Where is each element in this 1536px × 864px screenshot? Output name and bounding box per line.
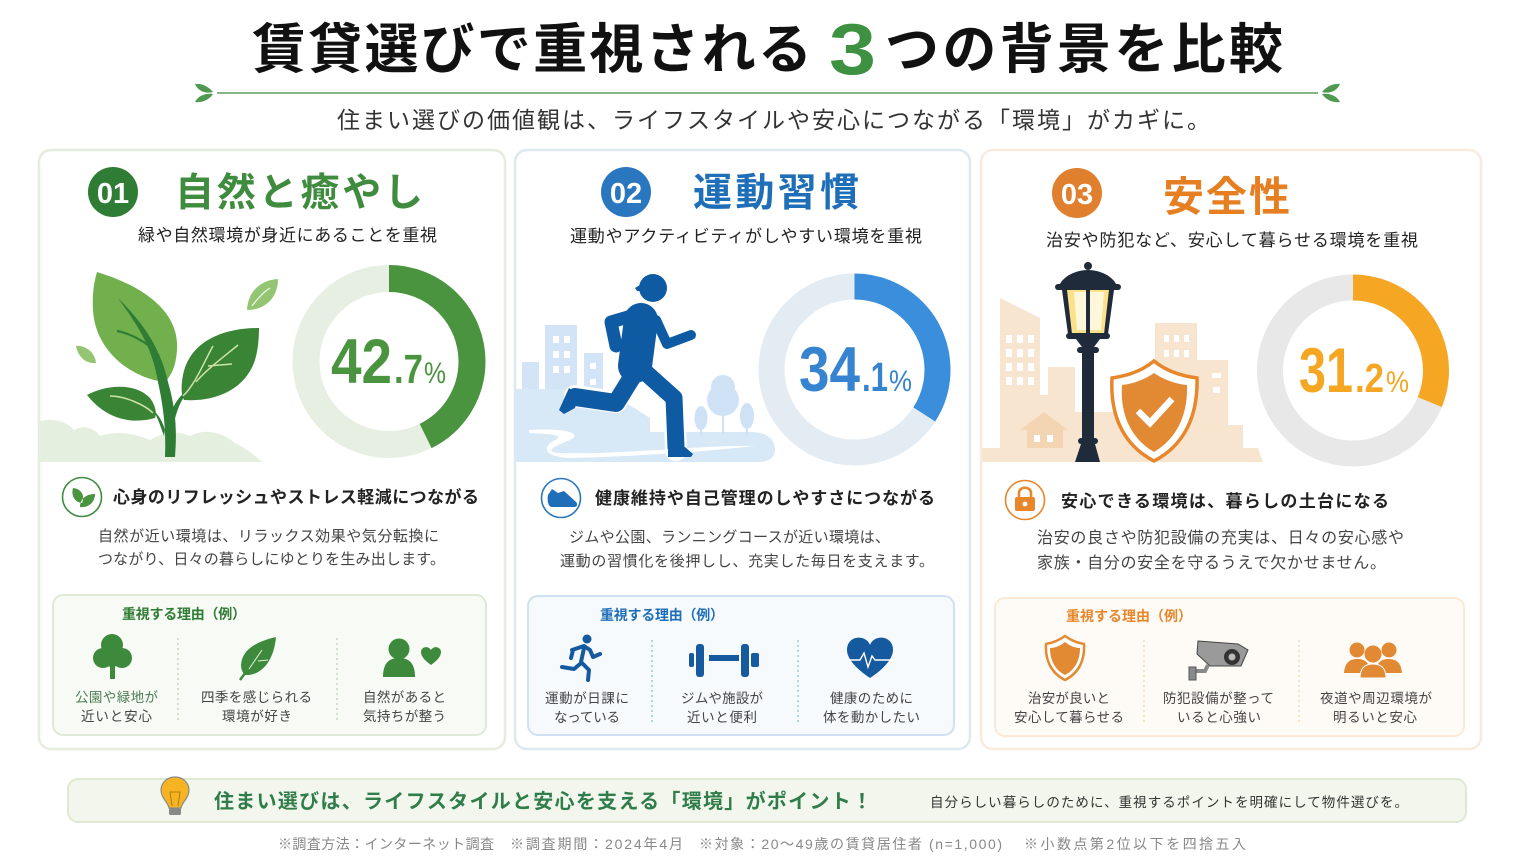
icon: light bulb xyxy=(161,777,189,815)
reason: bright night streets xyxy=(1320,642,1432,725)
panel frame xyxy=(515,150,970,749)
reason: security camera: いると心強い xyxy=(1177,710,1261,725)
donut chart 31.2%: % xyxy=(1386,366,1409,399)
reason: wellbeing: 気持ちが整う xyxy=(363,709,446,724)
body text xyxy=(1037,529,1404,572)
reason: security camera xyxy=(1163,641,1274,725)
reason: gym nearby xyxy=(681,644,764,725)
body text xyxy=(560,529,934,570)
panel frame xyxy=(39,150,505,749)
icon: padlock xyxy=(1006,480,1044,520)
donut chart 34.1% xyxy=(772,286,938,452)
reason: park: 近いと安心 xyxy=(81,709,152,724)
body text: つながり、日々の暮らしにゆとりを生み出します。 xyxy=(98,551,445,568)
body text: 自然が近い環境は、リラックス効果や気分転換に xyxy=(98,528,439,545)
body text: 運動の習慣化を後押しし、充実した毎日を支えます。 xyxy=(560,552,934,570)
reason: park: 公園や緑地が xyxy=(75,690,158,705)
illustration: street lamp and shield xyxy=(982,262,1263,462)
footnote: ※小数点第2位以下を四捨五入 xyxy=(1024,836,1246,852)
reason: wellbeing xyxy=(363,638,446,724)
subtitle: 住まい選びの価値観は、ライフスタイルや安心につながる「環境」がカギに。 xyxy=(337,107,1210,133)
bottom summary bar xyxy=(68,777,1466,822)
panel: 運動習慣 xyxy=(515,150,970,749)
reason: wellbeing: 自然があると xyxy=(363,689,446,705)
reason: health: 体を動かしたい xyxy=(823,710,920,725)
reason: bright night streets: 明るいと安心 xyxy=(1333,710,1418,725)
title: 賃貸選びで重視される xyxy=(252,20,812,80)
summary note: 自分らしい暮らしのために、重視するポイントを明確にして物件選びを。 xyxy=(930,795,1408,810)
donut chart 34.1%: % xyxy=(889,365,912,398)
panel heading: 運動習慣 xyxy=(693,172,859,215)
reasons label: 重視する理由（例） xyxy=(1066,608,1192,624)
reason: public safety: 治安が良いと xyxy=(1028,691,1110,706)
panel frame xyxy=(981,150,1481,749)
reason: daily exercise: なっている xyxy=(554,710,620,725)
footnote: ※調査期間：2024年4月 xyxy=(510,836,683,852)
body text: 治安の良さや防犯設備の充実は、日々の安心感や xyxy=(1037,529,1404,547)
title divider with leaves xyxy=(195,84,1340,102)
illustration: plant xyxy=(39,272,278,462)
number badge 01 xyxy=(88,167,138,217)
number badge 02 xyxy=(601,167,651,217)
donut chart 42.7% xyxy=(306,278,472,444)
title: つの背景を比較 xyxy=(885,20,1283,80)
footnote: ※対象：20〜49歳の賃貸居住者 (n=1,000) xyxy=(699,836,1002,852)
donut chart 31.2%: 31 xyxy=(1299,336,1353,406)
benefit heading: 心身のリフレッシュやストレス軽減につながる xyxy=(113,487,479,507)
reason: public safety xyxy=(1014,636,1124,725)
reason: seasons: 環境が好き xyxy=(222,709,292,724)
reason: park xyxy=(75,634,158,724)
donut chart 34.1%: 34 xyxy=(799,335,860,405)
panel: 自然と癒やし xyxy=(39,150,505,749)
reason: public safety: 安心して暮らせる xyxy=(1014,710,1124,725)
title xyxy=(252,10,1283,90)
benefit heading: 安心できる環境は、暮らしの土台になる xyxy=(1061,491,1389,511)
reason: health: 健康のために xyxy=(830,690,913,706)
body text: 家族・自分の安全を守るうえで欠かせません。 xyxy=(1037,554,1386,572)
panel subheading: 治安や防犯など、安心して暮らせる環境を重視 xyxy=(1046,231,1418,250)
reason: seasons xyxy=(201,637,312,724)
body text: ジムや公園、ランニングコースが近い環境は、 xyxy=(569,529,890,546)
number badge 02: 02 xyxy=(610,178,642,210)
reason: daily exercise xyxy=(545,634,629,725)
number badge 01: 01 xyxy=(97,178,129,210)
panel heading: 自然と癒やし xyxy=(175,172,423,215)
reason: daily exercise: 運動が日課に xyxy=(545,691,629,706)
title: 3 xyxy=(829,10,876,90)
donut chart 31.2% xyxy=(1270,288,1436,454)
icon: leaves xyxy=(62,478,102,516)
benefit heading: 健康維持や自己管理のしやすさにつながる xyxy=(595,488,935,508)
number badge 03 xyxy=(1052,168,1102,218)
reasons label: 重視する理由（例） xyxy=(600,607,724,623)
footnote: ※調査方法：インターネット調査 xyxy=(278,836,494,852)
number badge 03: 03 xyxy=(1061,179,1093,211)
panel: 安全性 xyxy=(981,150,1481,749)
donut chart 42.7%: 42 xyxy=(331,327,392,397)
reason: seasons: 四季を感じられる xyxy=(201,689,312,705)
donut chart 31.2%: .2 xyxy=(1355,355,1384,401)
reason: gym nearby: ジムや施設が xyxy=(681,691,764,706)
reasons box xyxy=(995,598,1464,736)
panel subheading: 緑や自然環境が身近にあることを重視 xyxy=(138,226,437,245)
reasons label: 重視する理由（例） xyxy=(122,606,246,622)
reason: health xyxy=(823,638,920,725)
donut chart 42.7%: .7 xyxy=(394,346,423,392)
illustration: runner xyxy=(516,274,775,462)
icon: running shoe xyxy=(542,478,580,518)
donut chart 34.1%: .1 xyxy=(862,354,888,400)
body text xyxy=(98,528,445,568)
reasons box xyxy=(528,596,954,735)
panel heading: 安全性 xyxy=(1163,174,1290,220)
reason: gym nearby: 近いと便利 xyxy=(687,710,757,725)
donut chart 42.7%: % xyxy=(424,357,446,390)
reason: security camera: 防犯設備が整って xyxy=(1163,691,1274,706)
reasons box xyxy=(53,595,486,735)
reason: bright night streets: 夜道や周辺環境が xyxy=(1320,691,1432,706)
panel subheading: 運動やアクティビティがしやすい環境を重視 xyxy=(570,227,922,246)
summary message: 住まい選びは、ライフスタイルと安心を支える「環境」がポイント！ xyxy=(214,789,872,813)
footnote xyxy=(278,836,1246,852)
